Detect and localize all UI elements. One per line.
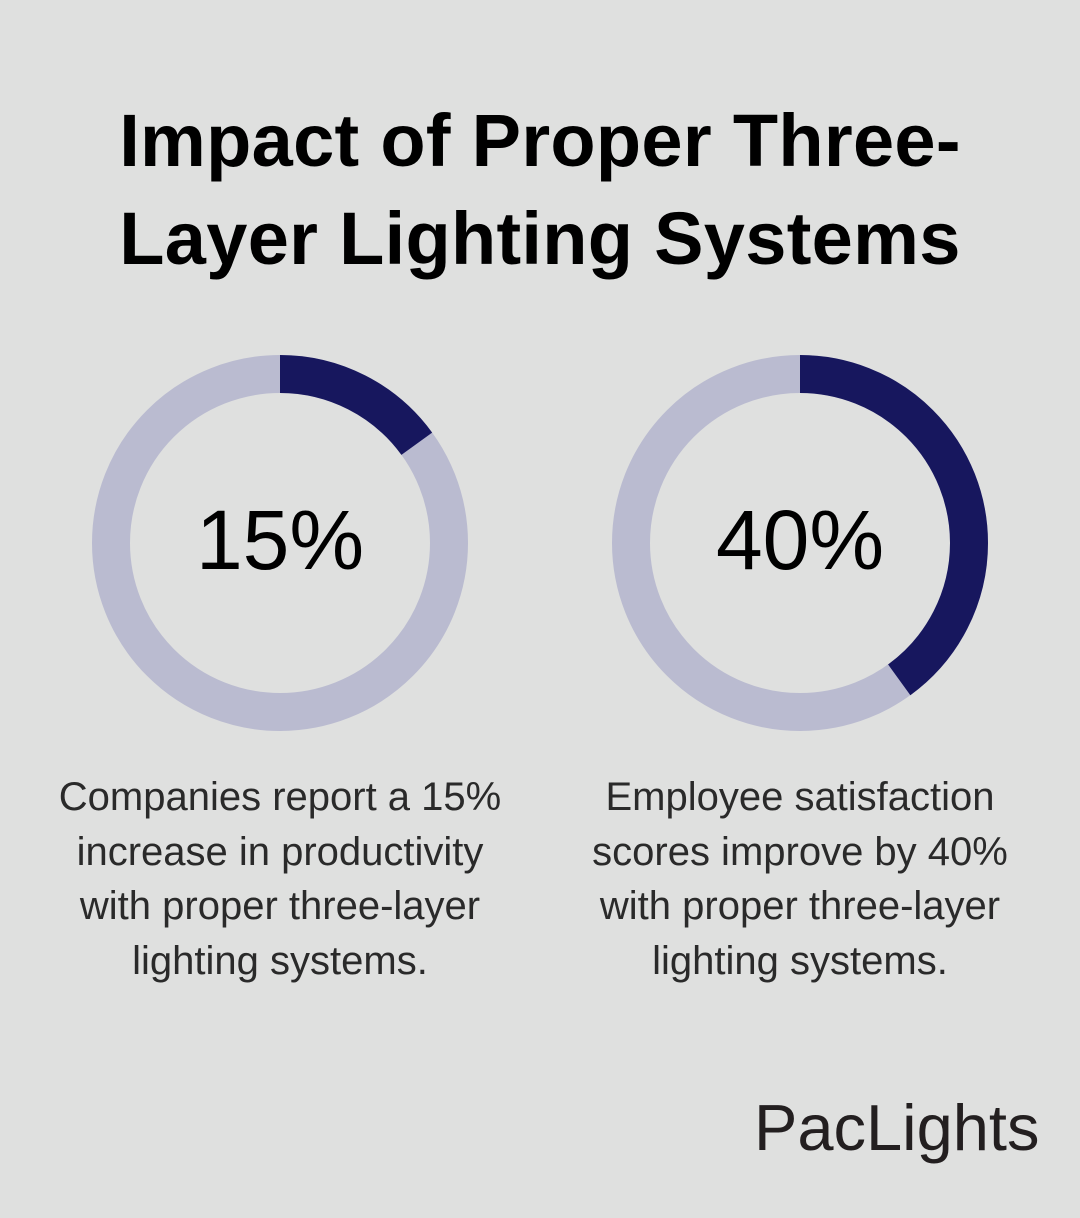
title: [119, 99, 961, 280]
text: left description: with proper three-layer: [80, 884, 480, 928]
title: Impact of Proper Three-: [119, 99, 961, 182]
text: left description: lighting systems.: [132, 938, 428, 982]
donut chart: 40%: 40%: [716, 493, 884, 587]
text: right description: Employee satisfaction: [605, 775, 995, 819]
text: right description: lighting systems.: [652, 938, 948, 982]
text: right description: scores improve by 40%: [592, 830, 1008, 874]
text: right description: with proper three-layer: [600, 884, 1000, 928]
text: left description: Companies report a 15%: [59, 775, 501, 819]
donut chart: 40%: [612, 355, 988, 731]
donut chart: 15%: 15%: [196, 493, 364, 587]
text: right description: [592, 775, 1008, 982]
logo: PacLights: [754, 1091, 1039, 1164]
donut chart: 15%: [92, 355, 468, 731]
text: left description: [59, 775, 501, 982]
text: left description: increase in productivity: [77, 830, 483, 874]
title: Layer Lighting Systems: [119, 197, 961, 280]
